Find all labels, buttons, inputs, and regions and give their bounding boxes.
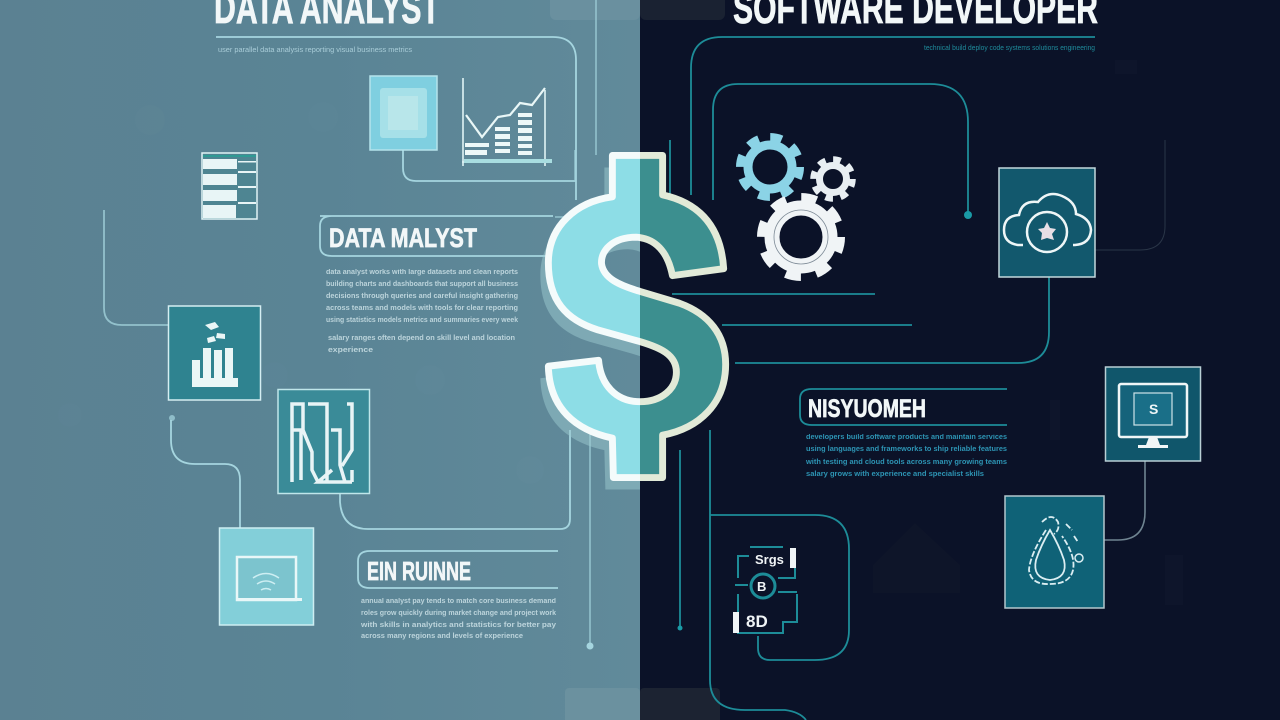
gear: blue [741, 138, 799, 196]
heading: third left section: EIN RUINNE [367, 556, 471, 586]
gear: small [814, 160, 852, 198]
text block: third left description: annual analyst pay tends to match core business demand [361, 598, 556, 605]
icon: data table [202, 153, 257, 219]
heading: data analyst section: DATA MALYST [329, 223, 477, 253]
icon tile: bar blocks [168, 306, 260, 400]
text block: third left description: across many regions and levels of experience [361, 633, 523, 640]
text block: data analyst description: salary ranges often depend on skill level and location [328, 335, 515, 342]
text block: data analyst description: data analyst works with large datasets and clean reports [326, 269, 518, 276]
dollar: light left half [544, 152, 640, 481]
icon: circuit diagram: B [757, 579, 766, 594]
text block: developer description: developers build software products and maintain services [806, 434, 1007, 441]
panel: faint top centre tab [550, 0, 725, 20]
connector lines: data analyst side [104, 0, 596, 646]
icon: gears [741, 138, 852, 275]
text block: developer description: salary grows with experience and specialist skills [806, 471, 984, 478]
icon: light square tile [370, 76, 437, 150]
connector dots: data analyst side [169, 415, 594, 650]
background: faint ghost shapes [58, 60, 1183, 605]
text block: third left description [360, 598, 556, 640]
icon tile: light laptop panel [220, 528, 314, 625]
icon: circuit diagram: Srgs [755, 552, 784, 567]
icon: circuit diagram [733, 547, 797, 633]
text block: developer description: with testing and cloud tools across many growing teams [805, 459, 1007, 466]
icon tile: cloud [999, 168, 1095, 277]
connector lines: software developer side [670, 37, 1095, 720]
subtitle: data analyst: user parallel data analysis reporting visual business metrics [218, 47, 413, 54]
heading: developer section: NISYUOMEH [808, 395, 926, 423]
icon tile: tall circuit bars [278, 390, 370, 494]
gear: large [763, 199, 839, 275]
icon: dollar sign [540, 155, 726, 490]
panel: faint bottom centre tab [565, 688, 720, 720]
icon tile: monitor: S [1149, 401, 1158, 417]
text block: data analyst description [326, 269, 518, 354]
panel: software developer background [640, 0, 1280, 720]
text block: developer description: using languages and frameworks to ship reliable features [806, 446, 1007, 453]
subtitle: software developer: technical build deploy code systems solutions engineering [924, 45, 1095, 52]
dollar: shadow [540, 168, 640, 490]
dollar: teal right half [640, 152, 730, 481]
chart: line and stacked bars [462, 78, 552, 166]
text block: developer description [805, 434, 1007, 478]
text block: data analyst description: across teams and models with tools for clear reporting [326, 305, 518, 312]
icon tile: bulb [1005, 496, 1104, 608]
icon tile: monitor [1106, 367, 1200, 461]
text block: third left description: roles grow quickly during market change and project work [361, 610, 556, 617]
text block: data analyst description: decisions through queries and careful insight gathering [326, 293, 518, 300]
text block: data analyst description: using statistics models metrics and summaries every week [326, 317, 518, 324]
panel: data analyst background [0, 0, 640, 720]
connector dots: software developer side [678, 211, 972, 630]
text block: third left description: with skills in analytics and statistics for better pay [360, 622, 556, 629]
text block: data analyst description: experience [328, 347, 373, 354]
connector: faint right lines [1095, 140, 1165, 540]
text block: data analyst description: building charts and dashboards that support all business [326, 281, 518, 288]
icon: circuit diagram: 8D [746, 612, 768, 631]
